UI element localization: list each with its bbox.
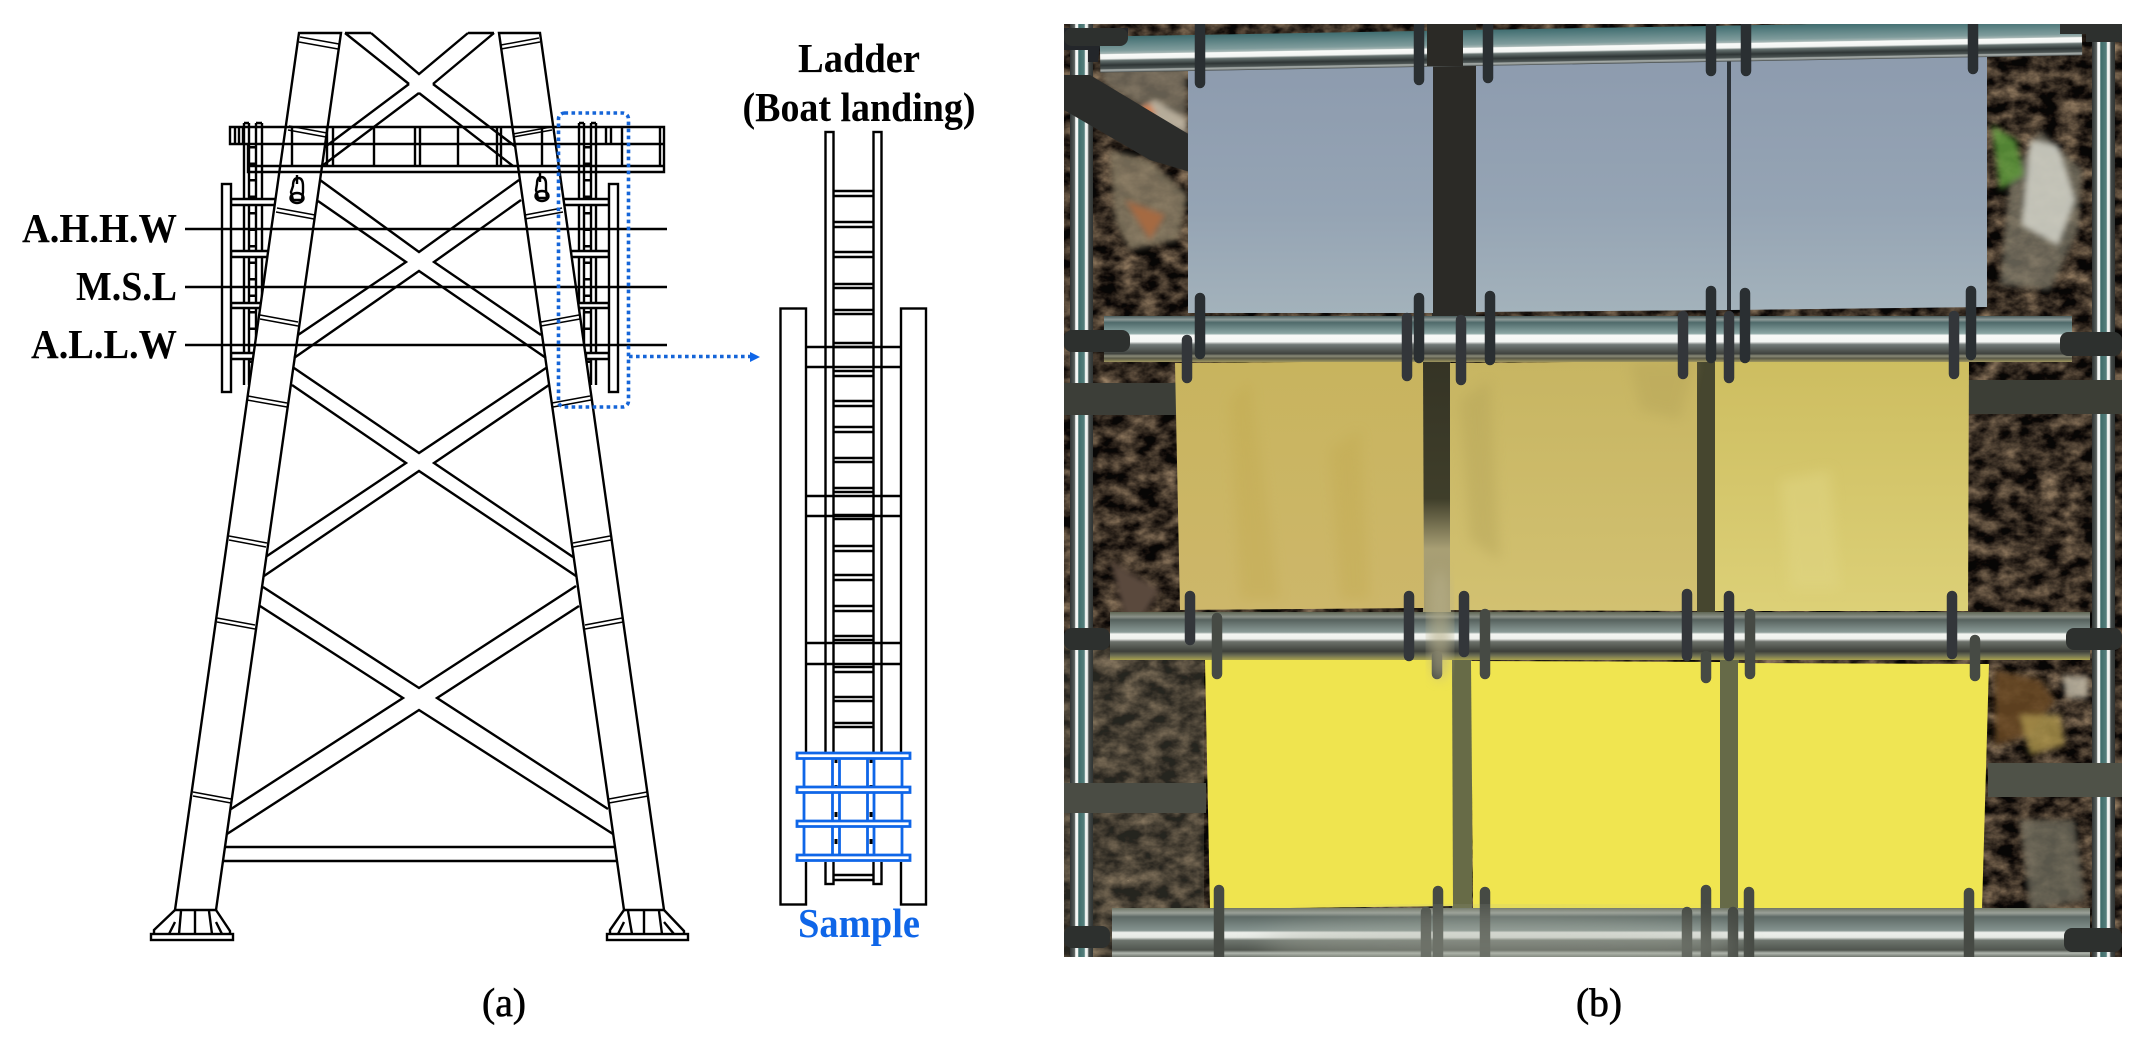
black straps: [1064, 24, 2122, 915]
label: A.L.L.W: A.L.L.W: [31, 321, 177, 367]
horizontal beam: [223, 847, 617, 861]
panel a: jacket structure elevation: [22, 33, 760, 940]
rock texture: [1064, 24, 2122, 957]
tan sample plates: [1175, 358, 1969, 611]
right boat landing ladder: [579, 123, 596, 385]
dotted blue arrow: [629, 352, 760, 362]
vertical rods: [1070, 24, 2115, 957]
caption (a): (a): [482, 980, 526, 1025]
right bollard: [536, 173, 548, 201]
left leg: [175, 33, 341, 910]
cross bracing: [227, 33, 613, 834]
rod end clamps: [1064, 24, 2122, 952]
caption (b): (b): [1576, 980, 1622, 1025]
horizontal rods: [1100, 19, 2090, 957]
blue sample racks: [797, 752, 910, 862]
label: Sample: Sample: [798, 900, 920, 946]
water haze: [1260, 570, 1740, 979]
ladder rails: [826, 132, 882, 884]
panel b: photograph of coated samples: [1064, 19, 2122, 979]
heading: Ladder: Ladder: [798, 35, 920, 81]
right base plate: [607, 910, 688, 940]
label: A.H.H.W: A.H.H.W: [22, 205, 177, 251]
left boat landing ladder: [244, 123, 262, 385]
right fender and connectors: [563, 184, 618, 392]
panel: ladder detail: [742, 35, 976, 946]
yellow sample plates: [1205, 660, 1989, 909]
cable ties: grey row: [1200, 24, 1973, 360]
heading: Boat landing: (Boat landing): [742, 84, 976, 130]
right leg: [499, 33, 664, 910]
rock background: [1064, 24, 2122, 957]
marine growth patches: [1100, 62, 2088, 910]
ladder rungs: [833, 191, 873, 880]
cable ties: yellow row: [1217, 614, 1975, 957]
grey sample plates: [1188, 52, 1987, 313]
water level lines: [185, 229, 667, 345]
dotted blue callout box: [558, 113, 628, 407]
left bollard: [290, 175, 304, 203]
label: M.S.L: M.S.L: [76, 263, 177, 309]
strap over top rod: [1427, 24, 1463, 66]
cable ties: tan row: [1187, 316, 1954, 656]
fender frames: [780, 308, 926, 904]
left base plate: [151, 910, 233, 940]
platform with railing: [230, 127, 664, 172]
left fender and connectors: [222, 184, 277, 392]
lower haze over rock: [1064, 640, 1204, 957]
